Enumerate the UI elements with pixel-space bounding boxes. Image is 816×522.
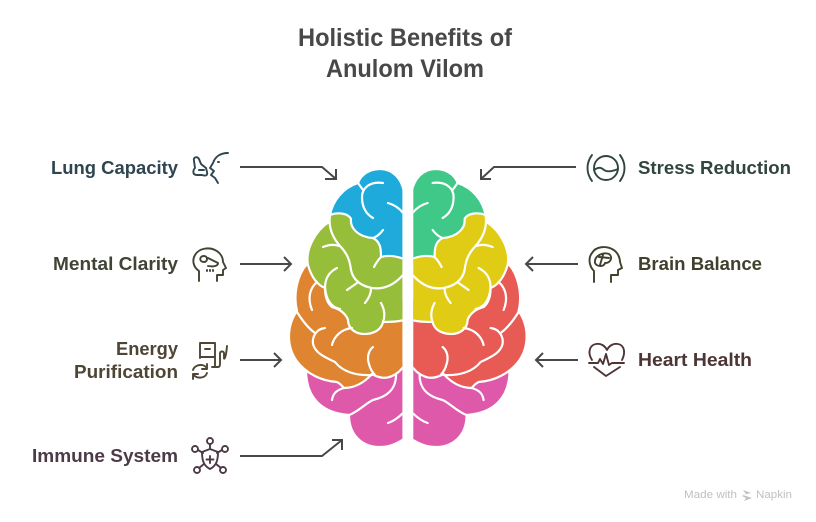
lobe: orange left [289,262,404,388]
icon: stress circle [588,155,624,181]
brain folds left [297,183,403,423]
label: Stress Reduction: Stress Reduction [638,157,791,178]
label: Mental Clarity: Mental Clarity [53,253,179,274]
footer: Made with Napkin: Made with [684,489,737,501]
label: Energy Purification: Energy [116,338,179,359]
arrow: Energy Purification [240,353,281,367]
label: Lung Capacity: Lung Capacity [51,157,179,178]
brain folds right [413,183,519,423]
label: Energy Purification [74,338,179,382]
label: Immune System: Immune System [32,445,178,466]
lobe: pink left [306,360,404,447]
footer: Made with Napkin: Napkin [756,489,792,501]
arrow: Immune System [240,440,342,456]
arrow: Heart Health [536,353,578,367]
lobe: red right [412,262,527,388]
lobe: green right [412,169,486,262]
brain: left hemisphere [289,169,404,447]
label: Heart Health: Heart Health [638,349,752,370]
lobe: yellow right [412,213,508,334]
lobe: green left [307,213,404,334]
icon: head with brain [590,247,622,282]
title: Holistic Benefits of [298,24,513,52]
arrow: Brain Balance [526,257,578,271]
icon: heart with pulse [589,344,624,376]
label: Energy Purification: Purification [74,361,178,382]
icon: fuel pump and cycle [193,343,227,379]
icon: lungs and face [193,153,228,183]
lobe: pink right [412,360,510,447]
lobe: blue left [330,169,404,262]
footer: Made with Napkin [684,489,792,501]
icon: shield network [192,438,228,473]
arrow: Mental Clarity [240,257,291,271]
arrow: Stress Reduction [481,167,576,179]
icon: head with thought [193,248,226,281]
arrow: Lung Capacity [240,167,336,179]
label: Brain Balance: Brain Balance [638,253,762,274]
brain: right hemisphere [412,169,527,447]
title: Anulom Vilom [326,55,484,83]
title [298,24,513,83]
